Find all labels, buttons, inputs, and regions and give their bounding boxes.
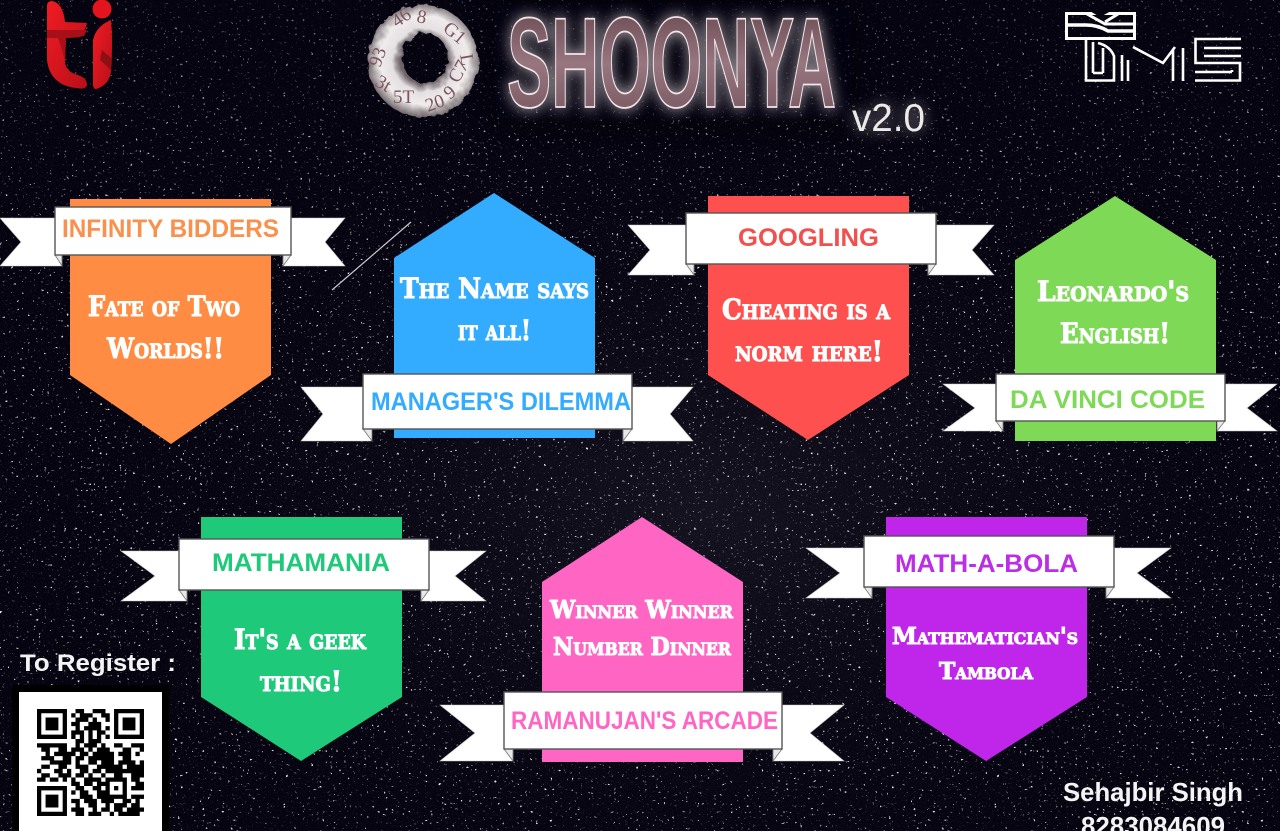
panel: Manager's Dilemma bbox=[301, 193, 693, 441]
ribbon: Infinity Bidders: INFINITY BIDDERS bbox=[62, 215, 279, 243]
ribbon: Ramanujan's Arcade: RAMANUJAN'S ARCADE bbox=[511, 707, 778, 735]
tagline: Leonardo's English: Leonardo's bbox=[1037, 275, 1189, 308]
icon: shoonya donut: 5T bbox=[393, 87, 414, 108]
banner shape: orange bbox=[70, 199, 271, 444]
ribbon: Da Vinci Code bbox=[943, 374, 1277, 431]
tagline: Leonardo's English: English! bbox=[1060, 317, 1170, 350]
panel: Infinity Bidders bbox=[0, 199, 345, 444]
tagline: Leonardo's English bbox=[1037, 275, 1189, 350]
text: contact bbox=[1063, 777, 1243, 831]
banner shape: teal bbox=[201, 517, 402, 761]
title: SHOONYA bbox=[495, 0, 850, 135]
icon: shoonya donut: G1 bbox=[439, 18, 470, 49]
ribbon: Manager's Dilemma bbox=[301, 374, 693, 441]
ribbon: Da Vinci Code: DA VINCI CODE bbox=[1010, 386, 1205, 414]
icon: shoonya donut: L bbox=[455, 52, 478, 67]
icon: shoonya donut bbox=[365, 4, 478, 117]
ribbon: Math-a-Bola bbox=[806, 536, 1171, 598]
tagline: Mathematician's Tambola: Tambola bbox=[939, 658, 1034, 685]
banner shape: green bbox=[1015, 196, 1216, 441]
icon: TMS logo bbox=[1066, 10, 1241, 81]
tagline: Fate of Two Worlds: Fate of Two bbox=[88, 290, 240, 323]
ribbon: Googling: GOOGLING bbox=[738, 224, 879, 252]
tagline: Mathematician's Tambola bbox=[892, 623, 1078, 685]
tagline: The Name says it all bbox=[400, 272, 589, 347]
banner shape: purple bbox=[886, 517, 1087, 761]
icon: shoonya donut: 20 bbox=[423, 90, 448, 117]
panel: Math-a-Bola bbox=[806, 517, 1171, 761]
thin diagonal line bbox=[332, 222, 411, 290]
ribbon: Infinity Bidders bbox=[0, 207, 345, 266]
icon: shoonya donut: 46 bbox=[388, 4, 415, 32]
icon: ti logo bbox=[47, 0, 112, 89]
panel: Ramanujan's Arcade bbox=[440, 517, 844, 762]
QR code bbox=[12, 685, 169, 831]
tagline: Winner Winner Number Dinner: Winner Winner bbox=[549, 595, 734, 624]
ribbon: Manager's Dilemma: MANAGER'S DILEMMA bbox=[371, 388, 631, 416]
icon: shoonya donut: 93 bbox=[365, 45, 391, 70]
tagline: Fate of Two Worlds: Worlds!! bbox=[106, 332, 224, 365]
panel: Mathamania bbox=[121, 517, 486, 761]
banner shape: pink bbox=[542, 517, 743, 762]
ribbon: Googling bbox=[628, 213, 994, 275]
banner shape: red bbox=[708, 196, 909, 440]
icon: shoonya donut: 8 bbox=[415, 6, 428, 29]
tagline: It's a geek thing: thing! bbox=[260, 665, 342, 698]
tagline: Fate of Two Worlds bbox=[88, 290, 240, 365]
banner shape: blue bbox=[394, 193, 595, 438]
panel: Googling bbox=[628, 196, 994, 440]
text: To Register: To Register : bbox=[20, 650, 176, 677]
tagline: Cheating is a norm here: norm here! bbox=[735, 335, 883, 368]
tagline: Cheating is a norm here: Cheating is a bbox=[722, 293, 890, 326]
icon: shoonya donut: C7 bbox=[444, 57, 473, 86]
tagline: Winner Winner Number Dinner: Number Dinner bbox=[553, 632, 732, 661]
subtitle: v2.0: v2.0 bbox=[852, 97, 925, 140]
tagline: The Name says it all: The Name says bbox=[400, 272, 589, 305]
subtitle: v2.0: v2.0 bbox=[852, 97, 925, 140]
panel: Da Vinci Code bbox=[943, 196, 1277, 441]
tagline: Cheating is a norm here bbox=[722, 293, 890, 368]
tagline: Mathematician's Tambola: Mathematician's bbox=[892, 623, 1078, 650]
ribbon: Ramanujan's Arcade bbox=[440, 692, 844, 761]
ribbon: Mathamania bbox=[121, 539, 486, 601]
ribbon: Mathamania: MATHAMANIA bbox=[212, 549, 390, 577]
icon: shoonya donut: 3t bbox=[372, 71, 395, 97]
tagline: It's a geek thing bbox=[234, 623, 367, 698]
ribbon: Math-a-Bola: MATH-A-BOLA bbox=[895, 550, 1078, 578]
tagline: It's a geek thing: It's a geek bbox=[234, 623, 367, 656]
tagline: The Name says it all: it all! bbox=[458, 314, 531, 347]
icon: shoonya donut: 9 bbox=[440, 82, 460, 104]
text: contact: Sehajbir Singh bbox=[1063, 777, 1243, 807]
tagline: Winner Winner Number Dinner bbox=[549, 595, 734, 661]
